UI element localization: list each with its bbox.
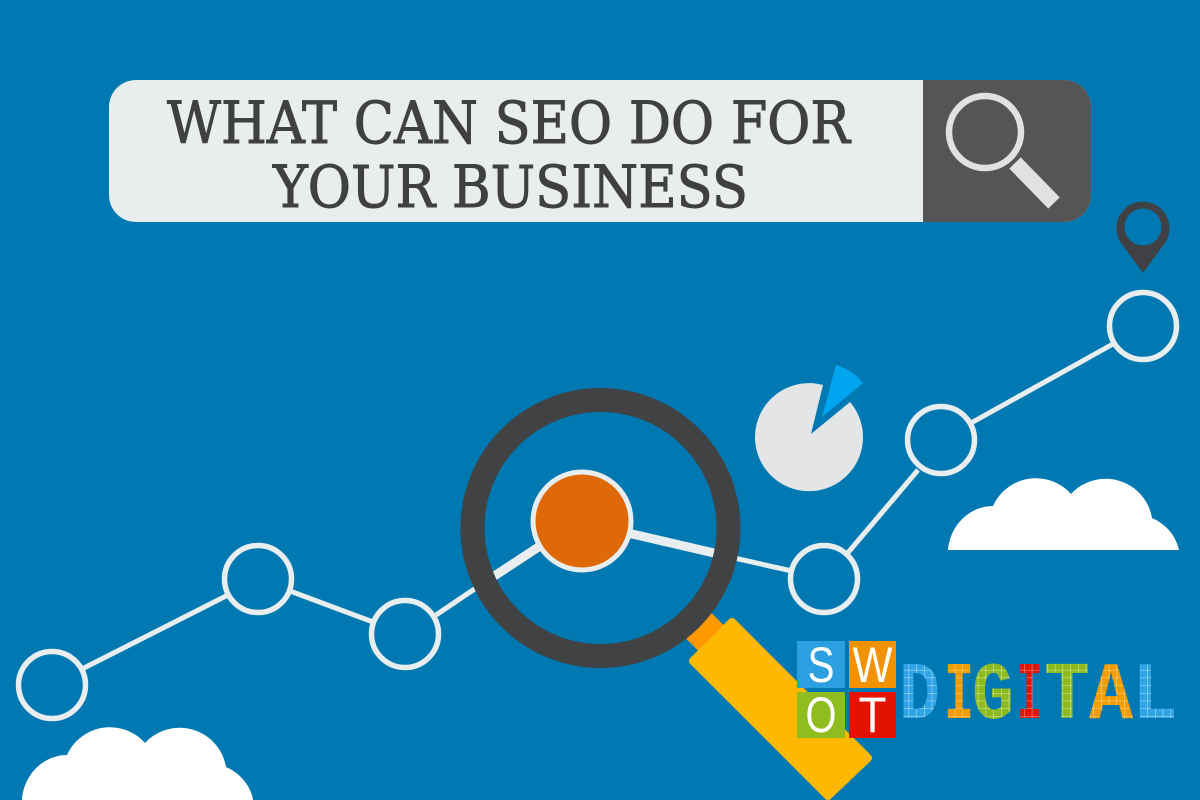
title: WHAT CAN SEO DO FOR <box>167 89 852 157</box>
cloud bottom left <box>22 727 253 800</box>
title: YOUR BUSINESS <box>272 153 748 221</box>
magnifier handle <box>693 622 868 796</box>
DIGITAL wordmark: I <box>1017 650 1042 743</box>
magnifier handle neck <box>679 606 725 652</box>
SWOT tiles: S <box>808 637 834 693</box>
icon: pie chart <box>755 365 863 491</box>
SWOT tiles: O <box>806 687 836 743</box>
line chart <box>18 292 1176 718</box>
DIGITAL wordmark: G <box>972 650 1014 743</box>
chart node 6 <box>908 406 974 474</box>
DIGITAL wordmark: T <box>1044 650 1090 743</box>
SWOT tiles: W <box>852 637 893 693</box>
SWOT tiles <box>797 637 896 743</box>
chart node 2 <box>224 546 292 612</box>
pie slice <box>822 365 863 417</box>
search bar <box>109 80 1091 222</box>
chart node 5 <box>790 546 858 612</box>
chart node 1 <box>18 652 86 718</box>
title <box>167 89 852 221</box>
DIGITAL wordmark <box>899 650 1178 743</box>
magnifying glass <box>472 400 868 796</box>
DIGITAL wordmark: D <box>899 650 940 743</box>
SWOT tiles: T <box>858 687 886 743</box>
icon: map pin <box>1116 202 1169 273</box>
chart node 7 <box>1110 292 1176 360</box>
DIGITAL wordmark: A <box>1089 650 1134 743</box>
magnifier lens ring <box>472 400 728 656</box>
icon: search magnifier <box>949 96 1054 203</box>
DIGITAL wordmark: I <box>944 650 974 743</box>
logo: SWOT Digital <box>797 637 1178 743</box>
highlighted orange node <box>533 472 631 570</box>
DIGITAL wordmark: L <box>1132 650 1178 743</box>
search button <box>923 80 1091 222</box>
cloud right <box>948 478 1179 550</box>
chart node 3 <box>372 600 438 668</box>
